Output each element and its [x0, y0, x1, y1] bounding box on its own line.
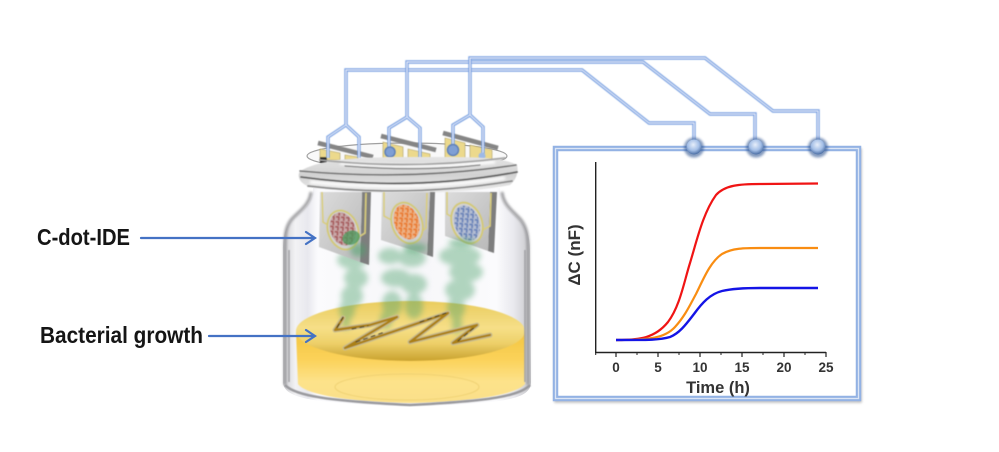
- wire 1: [328, 70, 694, 158]
- streak halo: [335, 313, 490, 348]
- x axis tick labels: 0: [612, 360, 620, 375]
- jar wall lines: [289, 250, 525, 382]
- x axis title: Time (h): [686, 379, 750, 397]
- plume 3: [439, 246, 483, 334]
- streak line: [335, 313, 490, 348]
- label: C-dot-IDE: C-dot-IDE: [37, 224, 130, 250]
- x axis tick labels: 20: [776, 360, 792, 375]
- line chart axes: [596, 162, 826, 357]
- arrow: Bacterial growth: [209, 330, 315, 342]
- plate 2: [381, 192, 435, 257]
- wire contacts: [385, 144, 486, 160]
- x axis tick labels: 10: [692, 360, 708, 375]
- jar: [283, 188, 531, 406]
- bacterial growth streak: [335, 313, 490, 348]
- terminal nodes: [684, 138, 828, 158]
- green residue on plates: [350, 239, 476, 257]
- plume 1: [337, 251, 368, 330]
- agar base rings: [335, 374, 479, 400]
- y axis title: ΔC (nF): [565, 224, 584, 286]
- back of jar rim: [307, 143, 507, 169]
- connecting wires: [328, 58, 818, 160]
- agar medium: [296, 301, 525, 403]
- panel frame: [556, 148, 860, 401]
- agar top surface: [296, 301, 525, 361]
- streak dark dots: [337, 313, 474, 342]
- gold pads: [320, 138, 492, 160]
- grey bars: [318, 133, 498, 157]
- plate 3: [445, 192, 497, 253]
- x axis tick labels: 15: [734, 360, 750, 375]
- green volatile plumes: [337, 246, 483, 334]
- label: Bacterial growth: Bacterial growth: [40, 322, 203, 348]
- rim glass: [299, 157, 518, 193]
- curve: blue: [616, 288, 818, 340]
- x axis tick labels: [612, 360, 834, 375]
- curve: red: [616, 184, 818, 340]
- rim thread lines: [300, 158, 517, 191]
- black contact square: [320, 157, 327, 163]
- x axis tick labels: 25: [818, 360, 834, 375]
- jar rim front: [299, 157, 518, 193]
- curve: orange: [616, 248, 818, 340]
- jar outline shading: [285, 192, 528, 385]
- wire 3: [453, 58, 818, 158]
- plume 2: [378, 248, 427, 329]
- wire 2: [389, 62, 755, 158]
- jar body: [283, 188, 531, 406]
- arrow: C-dot-IDE: [141, 232, 315, 244]
- jar base line: [285, 385, 530, 405]
- sensor tabs above rim: [318, 133, 498, 163]
- rim highlights: [310, 162, 505, 186]
- chart panel: [556, 138, 860, 401]
- sensor plates inside jar: [319, 192, 497, 265]
- x axis tick labels: 5: [654, 360, 662, 375]
- plate 1: [319, 192, 371, 265]
- agar side and base: [296, 331, 525, 403]
